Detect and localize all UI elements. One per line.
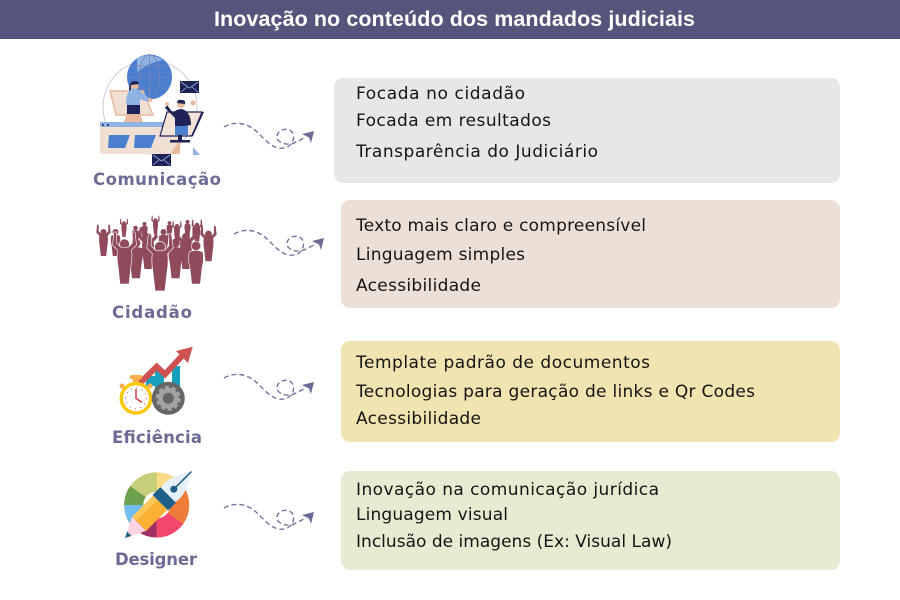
panel: designer (341, 471, 840, 570)
arrow: comunicação (224, 123, 314, 148)
panel: eficiência: Template padrão de documentos (355, 353, 650, 373)
icon: crowd of citizens (96, 216, 217, 291)
panel: designer: Inovação na comunicação jurídica (356, 480, 659, 500)
arrow: eficiência (224, 374, 314, 399)
panel: cidadão: Texto mais claro e compreensível (355, 216, 646, 236)
panel: eficiência (341, 341, 840, 442)
panel: cidadão: Acessibilidade (356, 276, 481, 296)
panel: designer: Inclusão de imagens (Ex: Visual Law) (356, 532, 672, 552)
panel: cidadão: Linguagem simples (356, 245, 525, 265)
panel: cidadão (341, 200, 840, 308)
label: Comunicação: Comunicação (93, 170, 221, 189)
arrow: designer (224, 504, 314, 529)
icon: efficiency stopwatch, gear and chart (120, 347, 193, 415)
panel: eficiência: Tecnologias para geração de links e Qr Codes (355, 382, 755, 402)
arrow: cidadão (234, 230, 324, 255)
icon: designer colour wheel and pen (117, 464, 199, 546)
label: Eficiência: Eficiência (112, 428, 202, 447)
panel: designer: Linguagem visual (356, 505, 508, 525)
panel: comunicação: Focada em resultados (356, 111, 551, 131)
panel: comunicação: Transparência do Judiciário (355, 142, 598, 162)
icon: communication illustration (100, 54, 204, 166)
label: Designer: Designer (115, 550, 198, 569)
title: Inovação no conteúdo dos mandados judiciais (214, 7, 695, 31)
label: Cidadão: Cidadão (112, 303, 192, 322)
panel: eficiência: Acessibilidade (356, 409, 481, 429)
header bar (0, 0, 900, 39)
panel: comunicação (334, 78, 840, 183)
panel: comunicação: Focada no cidadão (356, 84, 525, 104)
